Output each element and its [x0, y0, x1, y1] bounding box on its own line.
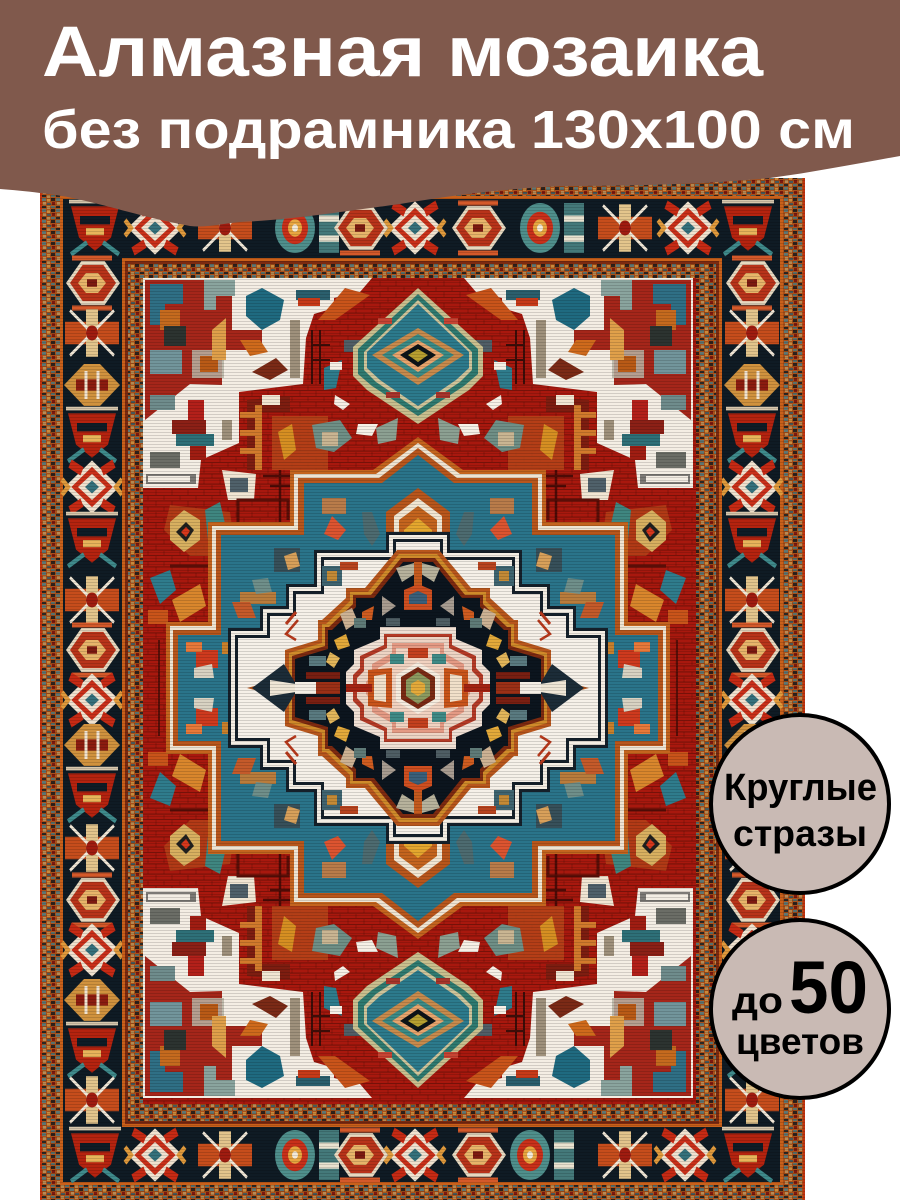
- teal medallion field: [178, 455, 418, 688]
- badge: up to 50 colours: 50: [789, 946, 868, 1029]
- badge: up to 50 colours: [711, 920, 889, 1098]
- field quarter: top left ornaments: [143, 278, 418, 688]
- white corner panel: [143, 278, 372, 488]
- stepped band accents: [286, 562, 358, 640]
- rug background: [40, 178, 805, 1200]
- top border motifs: [69, 202, 774, 254]
- right border motifs: [722, 258, 782, 1124]
- orange scroll on red field: [240, 288, 398, 470]
- weave texture: [40, 178, 805, 1200]
- badge: round rhinestones: [711, 715, 889, 893]
- black diamond motifs: [270, 562, 418, 688]
- inner frame: [122, 258, 722, 1127]
- field quarter mirrored bottom right: [418, 688, 693, 1098]
- badge: up to 50 colours: цветов: [736, 1021, 864, 1062]
- brown header banner: [0, 0, 900, 227]
- red side ornaments: [148, 470, 300, 688]
- orange diamond: [247, 550, 418, 688]
- red block inside corner: [145, 280, 262, 420]
- title: Алмазная мозаика: [42, 13, 764, 92]
- badge: round rhinestones: Круглые: [724, 767, 877, 809]
- badge: round rhinestones: стразы: [733, 813, 867, 854]
- chevron top: [386, 488, 418, 548]
- field quarter mirrored top right: [418, 278, 693, 688]
- field quarter mirrored bottom left: [143, 688, 418, 1098]
- bottom border motifs: [69, 1129, 774, 1181]
- white horizontal rays: [295, 682, 316, 688]
- teal medallion frame: [166, 437, 418, 688]
- outer speckled rug edge: [40, 178, 805, 1200]
- centre details: [346, 648, 418, 688]
- badge: up to 50 colours: до: [732, 980, 783, 1021]
- teal motifs: [186, 498, 388, 678]
- left tip of black diamond: [252, 664, 296, 688]
- left border motifs: [62, 258, 122, 1124]
- subtitle: без подрамника 130х100 см: [42, 100, 855, 160]
- black diamond field: [270, 562, 418, 688]
- stepped white band: [228, 532, 418, 688]
- corner motifs: [146, 280, 330, 484]
- red central field: [143, 278, 696, 1104]
- central hexagon: [396, 662, 418, 688]
- pale centre medallion: [346, 627, 418, 688]
- small top medallion: [353, 288, 418, 424]
